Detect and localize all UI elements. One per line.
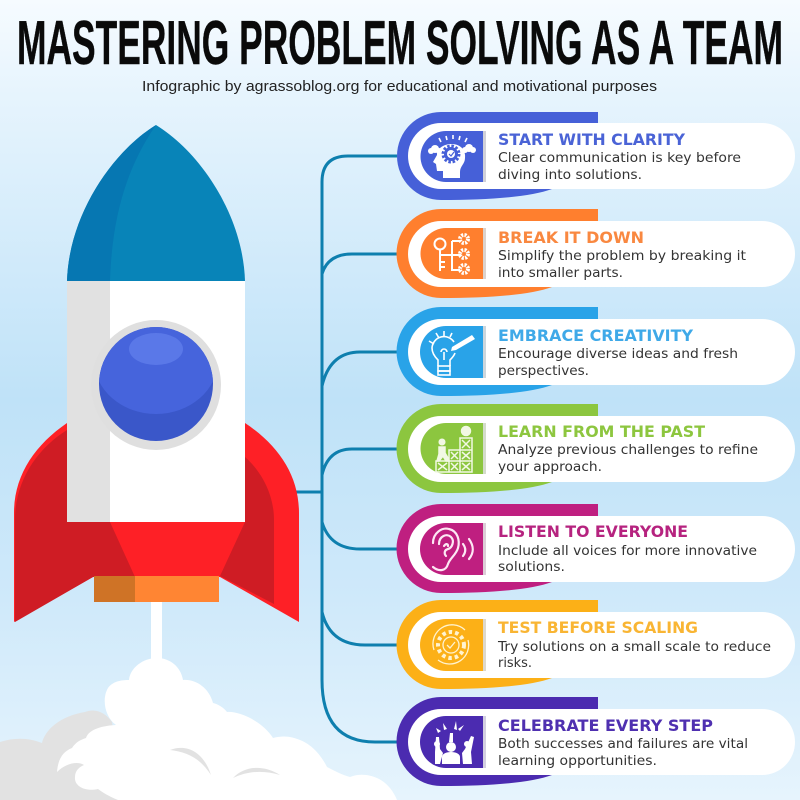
icon: ear with sound waves [433, 529, 473, 570]
rocket window [99, 320, 221, 450]
description: Both successes and failures are vital [498, 736, 748, 752]
description: Encourage diverse ideas and fresh [498, 346, 738, 362]
rocket nozzle [94, 576, 219, 602]
exhaust clouds [0, 602, 397, 800]
icon: gear with check mark [433, 625, 469, 664]
description: Include all voices for more innovative [498, 543, 757, 559]
icon: head with gear [428, 135, 476, 178]
description: diving into solutions. [498, 167, 642, 183]
panel: learn from the past [396, 404, 795, 493]
heading: START WITH CLARITY [498, 130, 685, 149]
heading: CELEBRATE EVERY STEP [498, 716, 713, 735]
panel: celebrate every step [396, 697, 795, 786]
heading: LEARN FROM THE PAST [498, 422, 705, 441]
icon: cheering people [434, 721, 474, 764]
description: Analyze previous challenges to refine [498, 442, 758, 458]
heading: LISTEN TO EVERYONE [498, 522, 688, 541]
description: Try solutions on a small scale to reduce [497, 639, 771, 655]
heading: EMBRACE CREATIVITY [498, 326, 693, 345]
icon: steps with crosses [436, 426, 472, 472]
rocket body [67, 281, 245, 522]
panel: embrace creativity [397, 307, 795, 396]
description: Clear communication is key before [498, 150, 741, 166]
panel: break it down [396, 209, 795, 298]
description: your approach. [498, 459, 602, 475]
heading: BREAK IT DOWN [498, 228, 644, 247]
panel: start with clarity [397, 112, 795, 200]
panel: test before scaling [396, 600, 795, 689]
rocket nose cone [67, 125, 245, 281]
description: perspectives. [498, 363, 589, 379]
heading: TEST BEFORE SCALING [498, 618, 698, 637]
subtitle: Infographic by agrassoblog.org for educational and motivational purposes [142, 78, 657, 95]
description: Simplify the problem by breaking it [498, 248, 746, 264]
icon: light bulb and pencil [429, 331, 475, 375]
rocket fins [14, 423, 299, 622]
panel: listen to everyone [396, 504, 795, 593]
icon: key and gears [434, 235, 468, 273]
connector lines [296, 156, 397, 742]
description: risks. [498, 655, 532, 671]
description: into smaller parts. [498, 265, 623, 281]
description: solutions. [498, 559, 565, 575]
description: learning opportunities. [498, 753, 657, 769]
rocket [14, 125, 299, 622]
